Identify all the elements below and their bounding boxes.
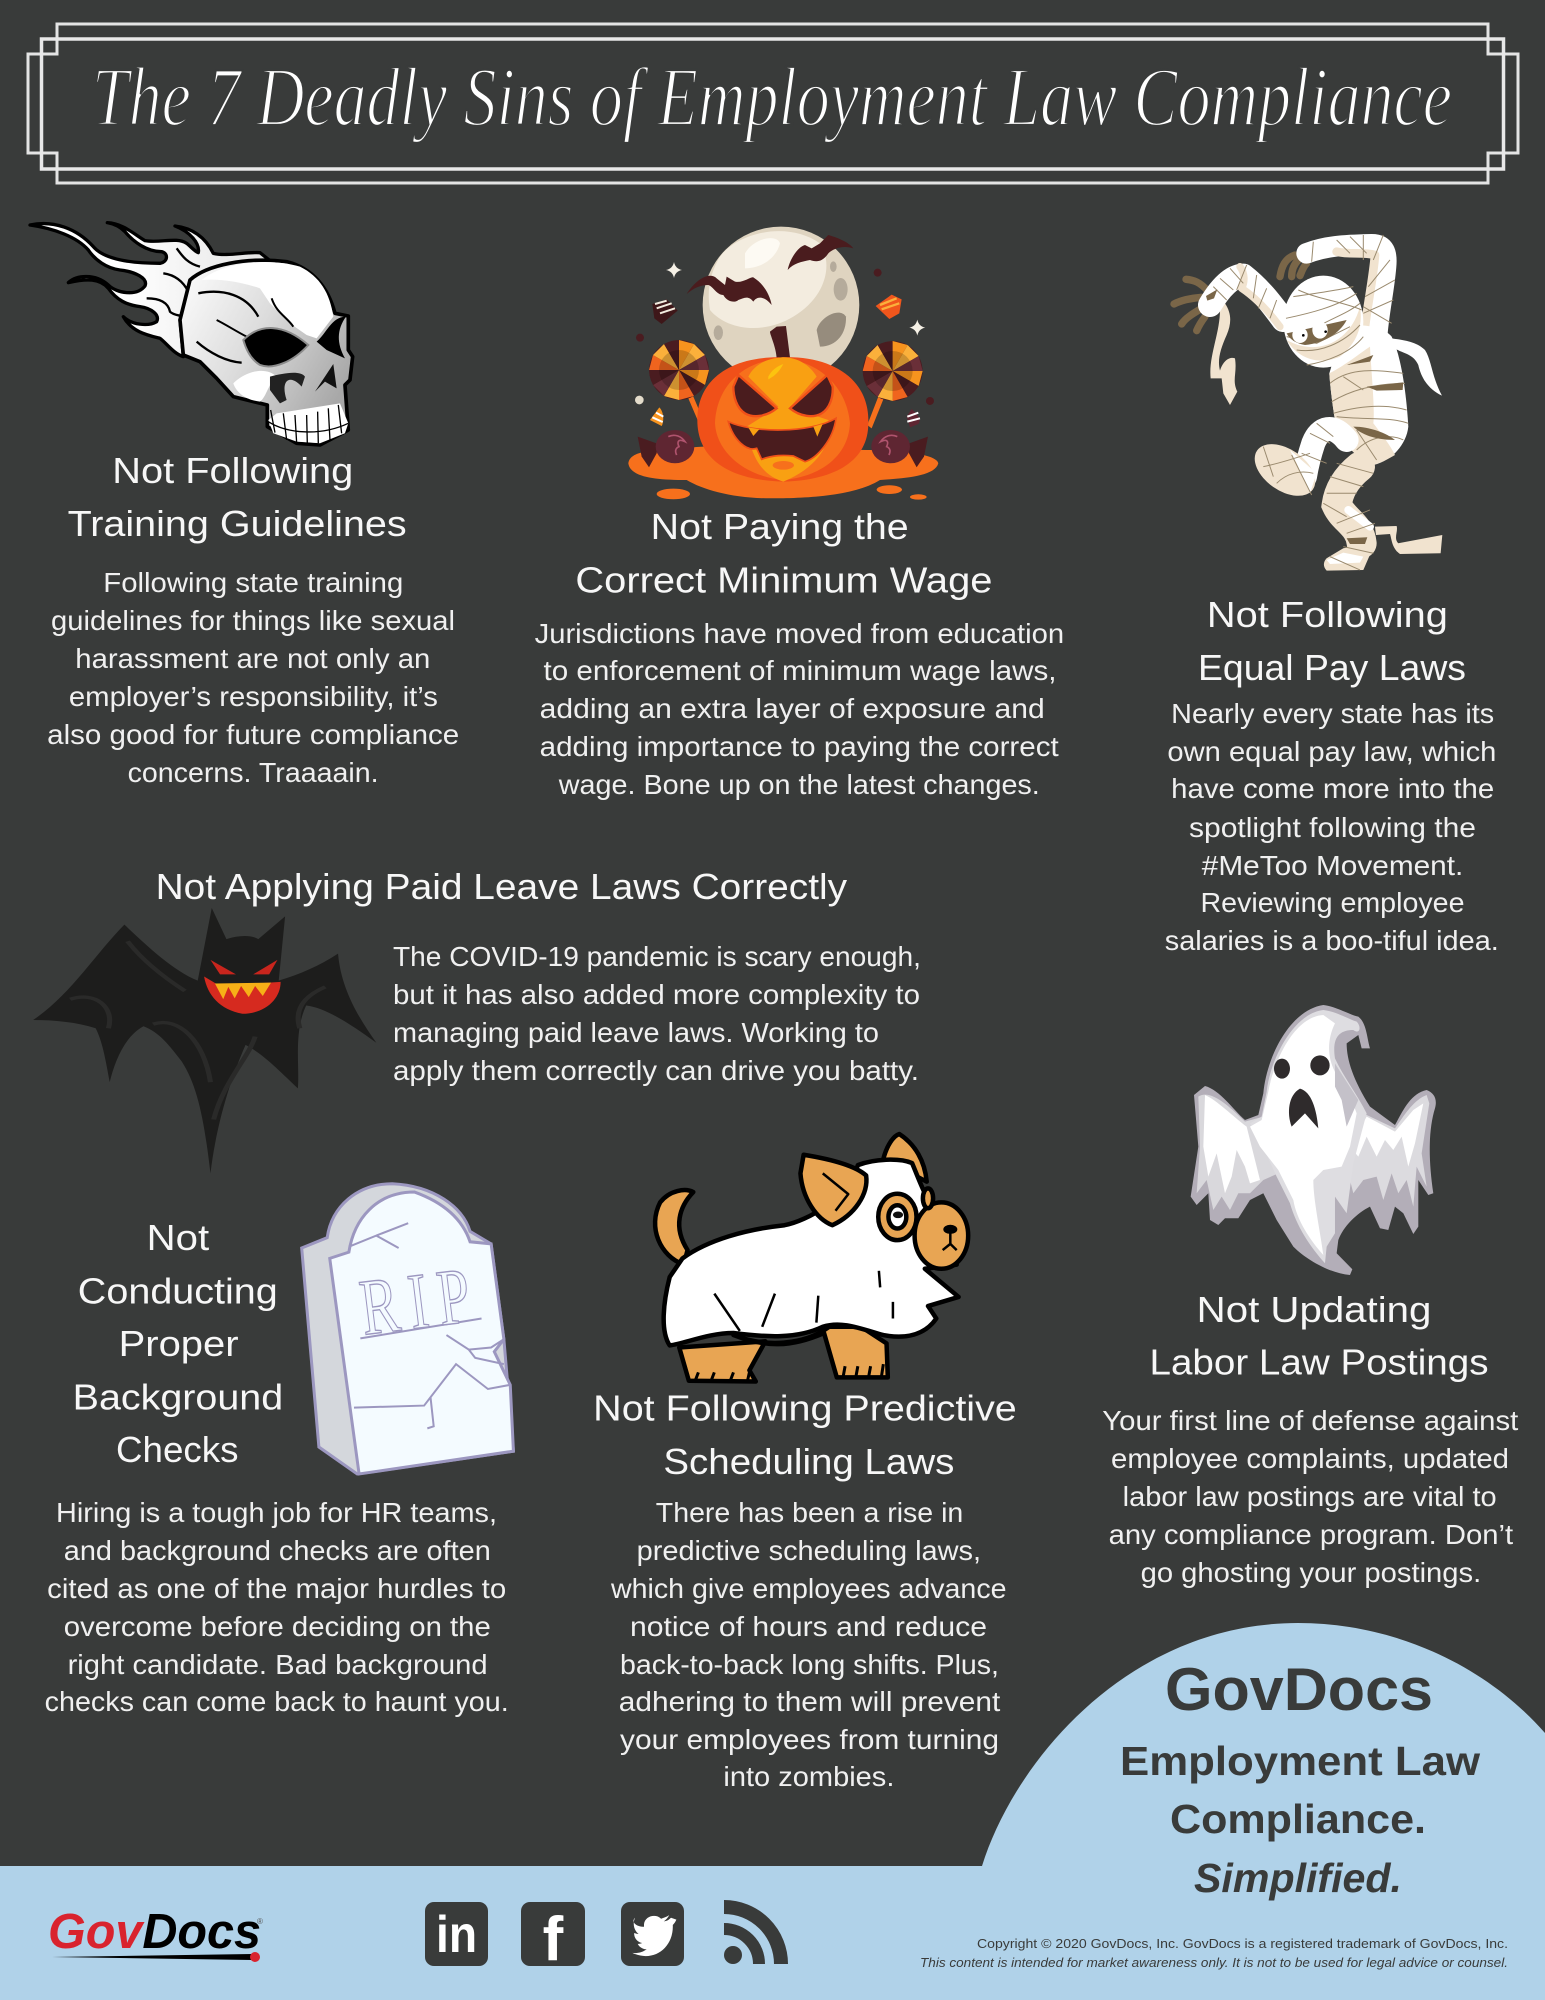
- panel: paid leave: [33, 866, 921, 1173]
- text block: have come more into the: [1171, 773, 1494, 804]
- heading: Proper: [119, 1323, 239, 1364]
- panel: labor law postings: [1102, 1005, 1519, 1588]
- text block: go ghosting your postings.: [1141, 1557, 1481, 1588]
- fingers: [1174, 255, 1307, 331]
- text block: There has been a rise in: [656, 1497, 963, 1528]
- icon: tombstone: RIP: [355, 1251, 485, 1353]
- icon: Facebook: f: [543, 1905, 564, 1974]
- icon: RSS: [724, 1907, 781, 1964]
- text block: right candidate. Bad background: [68, 1649, 488, 1680]
- text block: own equal pay law, which: [1167, 736, 1496, 767]
- text block: [47, 567, 459, 788]
- text block: Following state training: [103, 567, 403, 598]
- text block: Reviewing employee: [1200, 887, 1464, 918]
- heading: [575, 506, 992, 600]
- callout: GovDocs tagline: [1120, 1656, 1480, 1901]
- icon: LinkedIn: in: [436, 1906, 477, 1964]
- text block: [45, 1497, 509, 1717]
- text block: labor law postings are vital to: [1123, 1481, 1497, 1512]
- text block: adding importance to paying the correct: [540, 731, 1059, 762]
- text block: harassment are not only an: [75, 643, 430, 674]
- candies: [638, 430, 694, 467]
- text block: [393, 941, 921, 1086]
- text block: salaries is a boo-tiful idea.: [1165, 925, 1499, 956]
- text block: cited as one of the major hurdles to: [47, 1573, 506, 1604]
- logo: GovDocs: GovDocs: [48, 1905, 261, 1959]
- text block: Hiring is a tough job for HR teams,: [56, 1497, 497, 1528]
- icon: Twitter: [621, 1902, 684, 1966]
- heading: Scheduling Laws: [663, 1441, 954, 1482]
- heading: Not Following: [1207, 594, 1448, 635]
- heading: [1150, 1289, 1488, 1382]
- icon: mummy: [1174, 235, 1442, 571]
- text block: your employees from turning: [620, 1724, 999, 1755]
- text block: which give employees advance: [610, 1573, 1006, 1604]
- text block: [535, 618, 1064, 800]
- text block: adding an extra layer of exposure and: [540, 693, 1045, 724]
- heading: Checks: [116, 1429, 238, 1470]
- heading: [73, 1217, 283, 1470]
- text block: to enforcement of minimum wage laws,: [544, 655, 1056, 686]
- arms: [1210, 244, 1386, 333]
- icon: dog in ghost costume: [655, 1134, 968, 1382]
- text block: [610, 1497, 1006, 1792]
- footer band and dome: [0, 1623, 1545, 2000]
- icon: ghost: [1191, 1005, 1436, 1275]
- heading: Not Applying Paid Leave Laws Correctly: [156, 866, 848, 907]
- text block: Your first line of defense against: [1102, 1405, 1519, 1436]
- panel: equal pay: [1165, 235, 1499, 956]
- panel: background checks: [45, 1184, 513, 1717]
- title frame and heading: [28, 24, 1518, 183]
- panel: training guidelines: [30, 223, 459, 788]
- pumpkin: [770, 326, 790, 358]
- heading: Background: [73, 1376, 283, 1418]
- heading: Not: [147, 1217, 209, 1258]
- text block: adhering to them will prevent: [619, 1686, 1001, 1717]
- callout: GovDocs tagline: Compliance.: [1170, 1796, 1426, 1842]
- copyright text: [920, 1936, 1508, 1970]
- heading: Not Following Predictive: [593, 1388, 1017, 1428]
- heading: Not Updating: [1197, 1289, 1431, 1330]
- text block: employee complaints, updated: [1111, 1443, 1509, 1474]
- text block: back-to-back long shifts. Plus,: [620, 1649, 999, 1680]
- text block: also good for future compliance: [47, 719, 459, 750]
- text block: Nearly every state has its: [1171, 698, 1494, 729]
- frame: outer notched border: [28, 24, 1518, 183]
- text block: The COVID-19 pandemic is scary enough,: [393, 941, 921, 972]
- text block: employer’s responsibility, it’s: [69, 681, 438, 712]
- text block: and background checks are often: [64, 1535, 491, 1566]
- heading: [593, 1388, 1017, 1482]
- icon: LinkedIn: [425, 1902, 488, 1966]
- text block: predictive scheduling laws,: [637, 1535, 981, 1566]
- logo: GovDocs: ®: [257, 1917, 263, 1926]
- text block: wage. Bone up on the latest changes.: [558, 769, 1040, 800]
- text block: Jurisdictions have moved from education: [535, 618, 1064, 649]
- heading: Conducting: [78, 1270, 278, 1312]
- panel: minimum wage: [535, 227, 1064, 800]
- icon: pumpkin, moon and candy: [628, 227, 938, 500]
- heading: [68, 450, 407, 544]
- text block: but it has also added more complexity to: [393, 979, 920, 1010]
- text block: apply them correctly can drive you batty.: [393, 1055, 919, 1086]
- callout: GovDocs tagline: GovDocs: [1165, 1656, 1433, 1723]
- icon: tombstone: [302, 1184, 513, 1474]
- dark gaps and eyes: [1347, 355, 1373, 365]
- text block: [1102, 1405, 1519, 1588]
- wraps: [1213, 235, 1408, 570]
- heading: Not Following: [112, 450, 353, 491]
- icon: Facebook: [521, 1902, 585, 1974]
- text block: checks can come back to haunt you.: [45, 1686, 509, 1717]
- text block: concerns. Traaaain.: [128, 757, 379, 788]
- text block: guidelines for things like sexual: [51, 605, 455, 636]
- heading: Labor Law Postings: [1150, 1342, 1488, 1382]
- heading: Correct Minimum Wage: [575, 560, 992, 600]
- text block: overcome before deciding on the: [64, 1611, 491, 1642]
- sparkles: [666, 262, 682, 278]
- frame: inner border: [42, 39, 1504, 169]
- legs: [1305, 429, 1347, 477]
- head: [1283, 276, 1363, 368]
- callout: GovDocs tagline: Simplified.: [1194, 1855, 1402, 1901]
- icon: flaming skull: [30, 223, 353, 445]
- copyright text: This content is intended for market awareness only. It is not to be used for legal advice or counsel.: [920, 1955, 1508, 1970]
- text block: notice of hours and reduce: [630, 1611, 987, 1642]
- heading: [1198, 594, 1466, 688]
- icon: bat: [33, 908, 376, 1173]
- lollipops: [688, 395, 703, 424]
- text block: into zombies.: [723, 1761, 894, 1792]
- text block: managing paid leave laws. Working to: [393, 1017, 879, 1048]
- text block: spotlight following the: [1189, 812, 1476, 843]
- text block: #MeToo Movement.: [1202, 850, 1463, 881]
- panel: predictive scheduling: [593, 1134, 1017, 1792]
- heading: Equal Pay Laws: [1198, 647, 1466, 688]
- torso: [1329, 325, 1408, 465]
- callout: GovDocs tagline: Employment Law: [1120, 1738, 1480, 1784]
- text block: [1165, 698, 1499, 956]
- copyright text: Copyright © 2020 GovDocs, Inc. GovDocs is a registered trademark of GovDocs, Inc.: [977, 1936, 1508, 1951]
- heading: Training Guidelines: [68, 503, 407, 544]
- heading: Not Paying the: [651, 506, 909, 547]
- text block: any compliance program. Don’t: [1109, 1519, 1513, 1550]
